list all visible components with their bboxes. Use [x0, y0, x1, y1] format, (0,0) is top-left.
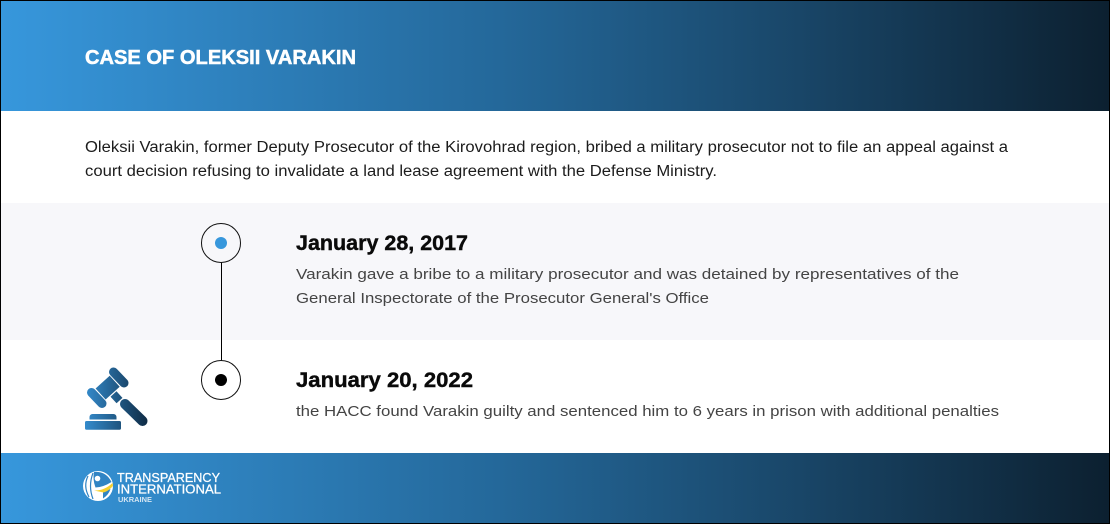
panel: header band — [1, 1, 1109, 111]
event: January 20, 2022: January 20, 2022 — [296, 369, 473, 392]
logo: Transparency International Ukraine — [83, 471, 221, 504]
timeline marker: second event — [202, 360, 240, 400]
logo wordmark: UKRAINE — [118, 497, 152, 504]
intro text block: court decision refusing to invalidate a land lease agreement with the Defense Ministry. — [85, 163, 717, 180]
logo wordmark — [117, 471, 221, 504]
panel: first timeline row background — [1, 203, 1109, 340]
panel: footer band — [1, 453, 1109, 523]
event: January 28, 2017: Varakin gave a bribe to a military prosecutor and was detained by representatives of the — [296, 266, 959, 283]
event: January 28, 2017 — [296, 232, 959, 307]
logo globe — [83, 471, 113, 501]
logo wordmark: INTERNATIONAL — [117, 482, 221, 496]
event: January 28, 2017: January 28, 2017 — [296, 232, 468, 255]
timeline connector — [220, 262, 222, 361]
icon: gavel — [85, 372, 142, 430]
timeline marker: first event — [202, 224, 240, 262]
event: January 20, 2022: the HACC found Varakin guilty and sentenced him to 6 years in prison with additional penalties — [296, 403, 999, 420]
event: January 20, 2022 — [296, 369, 999, 420]
event: January 28, 2017: General Inspectorate of the Prosecutor General's Office — [296, 290, 709, 307]
intro text block — [85, 139, 1008, 180]
intro text block: Oleksii Varakin, former Deputy Prosecutor of the Kirovohrad region, bribed a military prosecutor not to file an appeal against a — [85, 139, 1008, 156]
title: CASE OF OLEKSII VARAKIN — [85, 47, 356, 69]
logo wordmark: TRANSPARENCY — [117, 471, 221, 485]
